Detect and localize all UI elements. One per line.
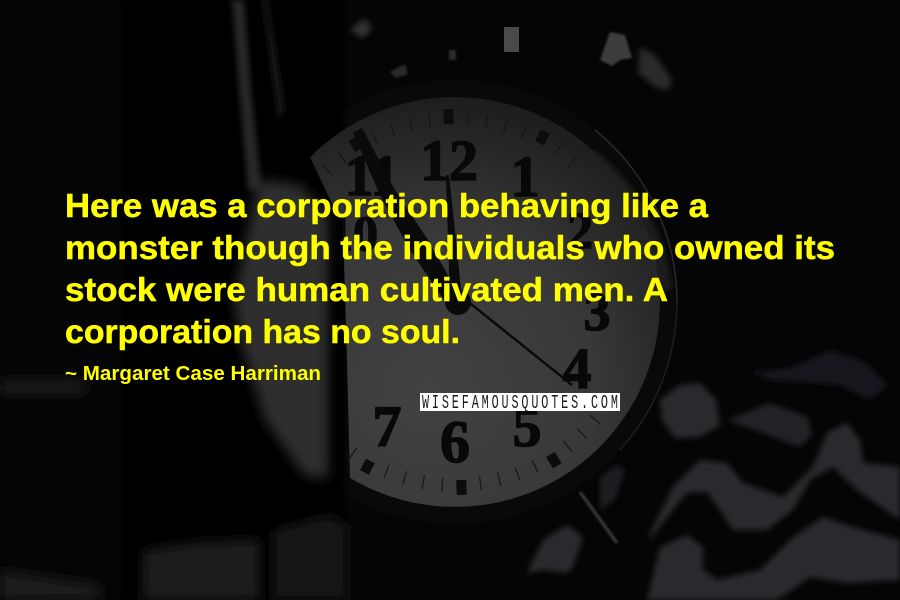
quote text: monster though the individuals who owned its <box>65 230 835 267</box>
quote text: stock were human cultivated men. A <box>65 272 668 309</box>
clock pin <box>580 492 617 543</box>
clock body and rim <box>233 80 677 524</box>
clock hands <box>353 128 572 385</box>
clock bells and top hardware <box>350 18 672 90</box>
quote text: corporation has no soul. <box>65 314 460 351</box>
wavy striped cloth <box>527 350 900 600</box>
numerals: 10 <box>328 205 378 261</box>
numerals: 11 <box>345 143 399 208</box>
quote text: Here was a corporation behaving like a <box>65 188 708 225</box>
numerals: 3 <box>584 282 610 342</box>
numerals: 12 <box>420 128 478 193</box>
attribution: ~ Margaret Case Harriman <box>65 363 321 385</box>
numerals <box>338 140 610 464</box>
watermark logo: WISEFAMOUSQUOTES.COM <box>422 392 618 414</box>
numerals: 6 <box>440 409 470 475</box>
quote text <box>65 188 835 351</box>
background table shapes <box>0 380 100 600</box>
minute ticks <box>322 112 601 492</box>
numerals: 1 <box>510 144 540 209</box>
numerals: 7 <box>372 394 402 459</box>
numerals: 2 <box>567 203 593 260</box>
numerals: 5 <box>512 394 542 459</box>
hour markers <box>347 106 563 498</box>
clock dial <box>310 97 660 507</box>
numerals: 4 <box>562 336 592 401</box>
bottle <box>120 0 347 600</box>
